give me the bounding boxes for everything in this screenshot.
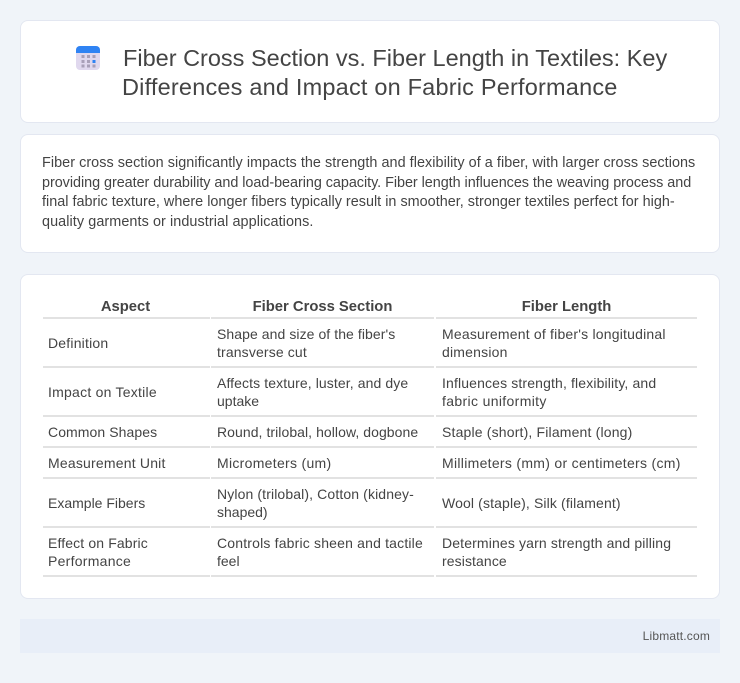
row: impact on textile (48, 375, 656, 409)
text block: summary: final fabric texture, where longer fibers typically result in smoother, stronger textiles perfect for high- (42, 194, 675, 210)
row: example fibers: Wool (staple), Silk (filament) (442, 495, 621, 511)
row: effect on fabric performance (48, 535, 671, 569)
title (122, 45, 668, 100)
row: measurement unit: Measurement Unit (48, 455, 166, 471)
row: common shapes (48, 424, 632, 440)
row: common shapes: Staple (short), Filament (long) (442, 424, 632, 440)
row: measurement unit (48, 455, 681, 471)
text block: summary: quality garments or industrial applications. (42, 214, 313, 230)
text block: summary (42, 155, 695, 230)
row: effect on fabric performance: Performance (48, 553, 131, 569)
row: example fibers: Nylon (trilobal), Cotton (kidney- (217, 486, 414, 502)
row: effect on fabric performance: feel (217, 553, 240, 569)
row: common shapes: Round, trilobal, hollow, dogbone (217, 424, 418, 440)
row: definition: Definition (48, 335, 108, 351)
title: Fiber Cross Section vs. Fiber Length in Textiles: Key (123, 45, 667, 71)
panel: header (20, 20, 720, 123)
icon: calendar (76, 46, 100, 70)
row: effect on fabric performance: Controls fabric sheen and tactile (217, 535, 423, 551)
panel: comparison table (20, 274, 720, 599)
row: example fibers: Example Fibers (48, 495, 145, 511)
row: definition (48, 326, 666, 360)
row: measurement unit: Micrometers (um) (217, 455, 331, 471)
row: definition: Shape and size of the fiber's (217, 326, 395, 342)
text block: summary: Fiber cross section significantly impacts the strength and flexibility of a fiber, with larger cross sections (42, 155, 695, 171)
text block: summary: providing greater durability and load-bearing capacity. Fiber length influences the weaving process and (42, 175, 691, 191)
row: common shapes: Common Shapes (48, 424, 157, 440)
row: definition: transverse cut (217, 344, 307, 360)
footer (20, 619, 720, 653)
row: effect on fabric performance: resistance (442, 553, 507, 569)
table header: Fiber Cross Section (253, 299, 392, 315)
row: measurement unit: Millimeters (mm) or centimeters (cm) (442, 455, 681, 471)
row: definition: Measurement of fiber's longitudinal (442, 326, 666, 342)
row: impact on textile: Impact on Textile (48, 384, 157, 400)
table header: Aspect (101, 299, 150, 315)
title: Differences and Impact on Fabric Performance (122, 74, 618, 100)
row: impact on textile: uptake (217, 393, 259, 409)
footer text: Libmatt.com (643, 629, 710, 643)
table header: Fiber Length (522, 299, 611, 315)
row: impact on textile: fabric uniformity (442, 393, 547, 409)
table header (101, 299, 611, 315)
row: example fibers (48, 486, 621, 520)
row: definition: dimension (442, 344, 508, 360)
row: example fibers: shaped) (217, 504, 268, 520)
row: effect on fabric performance: Determines yarn strength and pilling (442, 535, 671, 551)
row: impact on textile: Influences strength, flexibility, and (442, 375, 656, 391)
panel: summary (20, 134, 720, 253)
row: impact on textile: Affects texture, luster, and dye (217, 375, 408, 391)
row: effect on fabric performance: Effect on Fabric (48, 535, 148, 551)
